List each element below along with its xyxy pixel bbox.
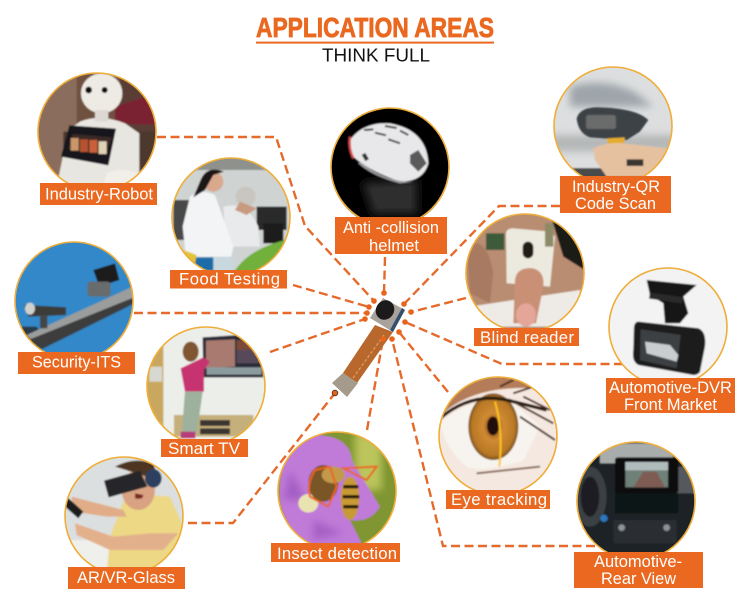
camera module	[332, 290, 414, 397]
panel: automotive DVR	[603, 263, 735, 414]
label	[574, 552, 703, 588]
photo: eye	[440, 378, 556, 490]
label	[335, 217, 447, 255]
label: Smart TV	[168, 439, 241, 458]
panel: industry robot	[33, 70, 160, 205]
photo: barcode scanner	[554, 68, 672, 176]
photo: dash camera	[610, 269, 726, 378]
label: Industry-Robot	[45, 184, 153, 204]
photo: car dashboard	[578, 442, 694, 552]
label	[606, 378, 735, 414]
label: Rear View	[601, 569, 677, 588]
sensor head	[370, 298, 405, 332]
photo: man with headset	[66, 458, 182, 567]
panel: AR VR glass	[60, 453, 190, 589]
label: Insect detection	[277, 544, 397, 563]
connector dots	[332, 290, 414, 396]
title: APPLICATION AREAS	[256, 12, 494, 43]
ribbon traces	[353, 335, 384, 378]
label: Automotive-DVR	[609, 378, 732, 397]
label: Food Testing	[179, 270, 280, 288]
panel: smart TV	[143, 323, 270, 458]
flex ribbon	[343, 325, 393, 383]
photo: girl at TV	[148, 328, 264, 439]
panel: QR code scan	[550, 63, 677, 213]
label: Front Market	[624, 395, 717, 414]
dashed connectors	[134, 137, 623, 546]
stiffener	[332, 373, 358, 397]
label: Code Scan	[575, 194, 656, 213]
lens	[372, 297, 398, 323]
photo: finger ring	[466, 214, 584, 328]
label: Blind reader	[480, 328, 574, 347]
panel: eye tracking	[433, 373, 563, 509]
panel: food testing	[167, 153, 297, 288]
panel: security ITS	[10, 237, 140, 374]
subtitle: THINK FULL	[322, 46, 430, 66]
photo: helmet	[332, 108, 448, 217]
label	[560, 176, 671, 213]
label: AR/VR-Glass	[77, 568, 175, 587]
label: Automotive-	[594, 552, 682, 571]
photo: lab workers	[172, 158, 290, 270]
photo: road cameras	[16, 242, 132, 352]
panel: anti-collision helmet	[327, 105, 453, 255]
label: Eye tracking	[451, 490, 547, 509]
photo: robot	[38, 74, 156, 183]
photo: bee on flower	[278, 432, 396, 543]
label: helmet	[369, 236, 419, 255]
label: Security-ITS	[32, 352, 121, 372]
panel: automotive rear view	[573, 440, 703, 588]
panel: blind reader	[465, 213, 585, 346]
panel: insect detection	[271, 427, 403, 563]
label: Industry-QR	[572, 177, 660, 196]
label: Anti -collision	[343, 218, 439, 237]
